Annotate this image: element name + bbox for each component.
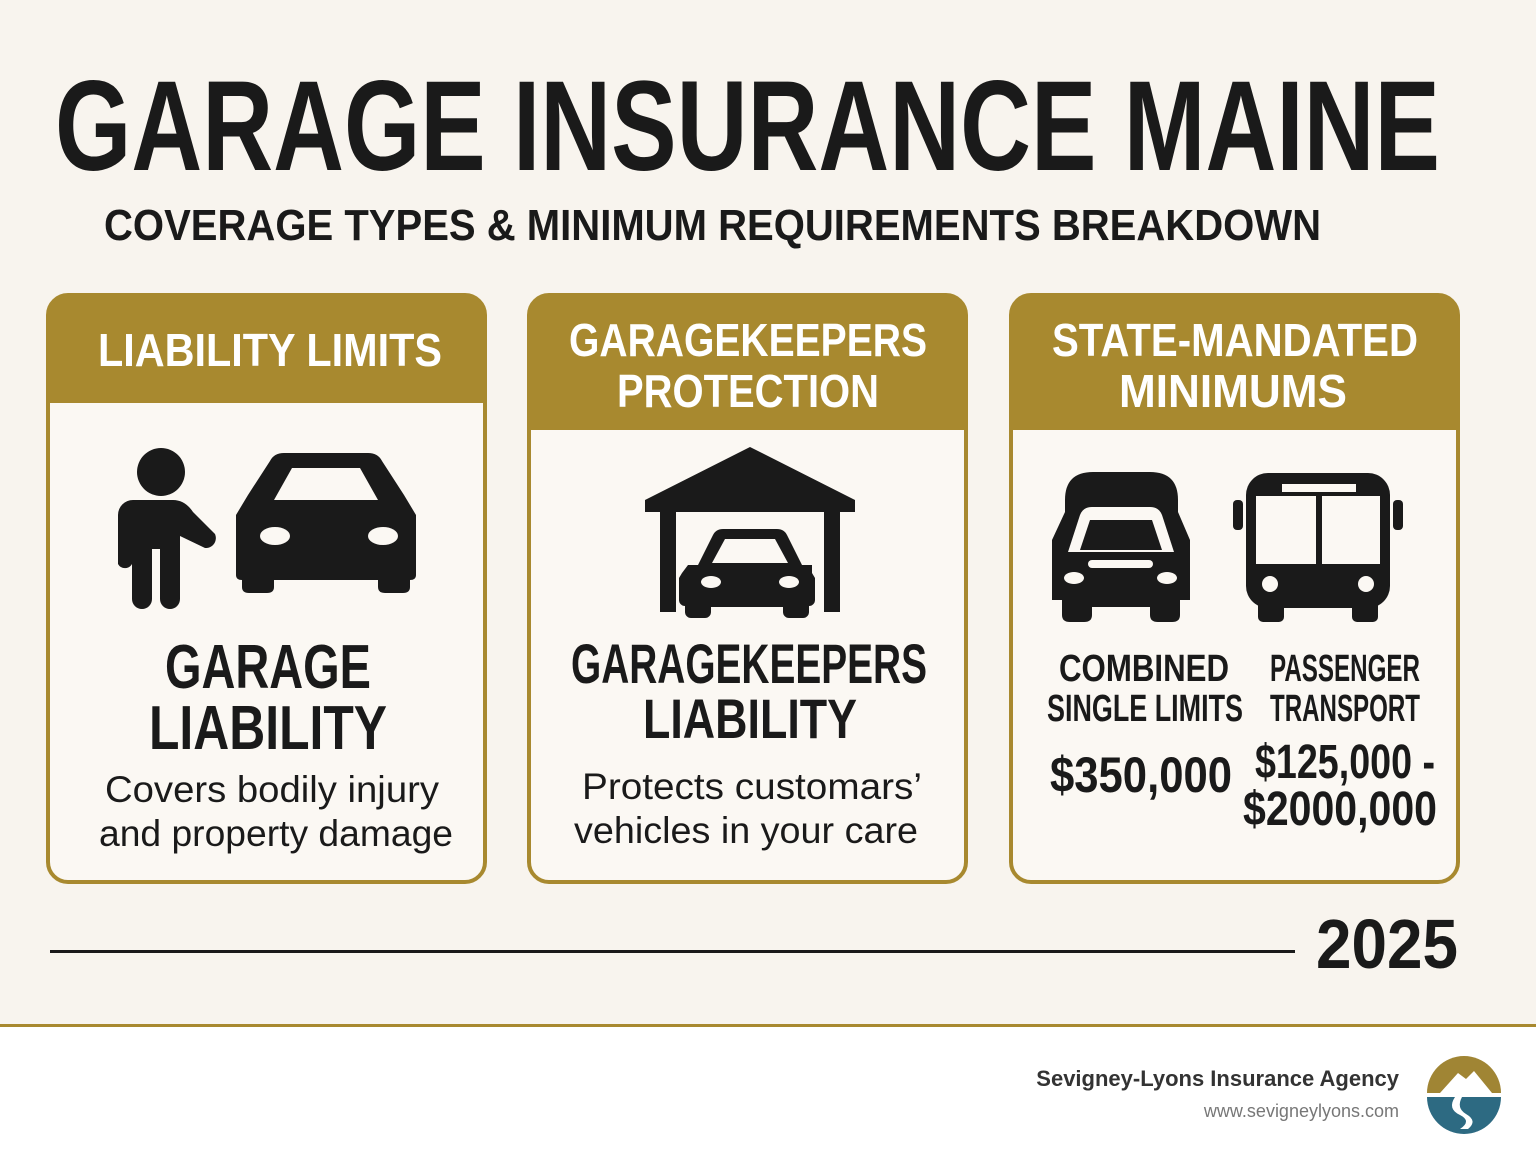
description: Covers bodily injury (105, 769, 440, 810)
description (574, 766, 922, 851)
icon: garage with car (645, 447, 855, 618)
label: combined single limits (1047, 648, 1243, 803)
label: combined single limits: SINGLE LIMITS (1047, 688, 1243, 730)
footer: Sevigney-Lyons Insurance Agency (1036, 1066, 1400, 1091)
label: passenger transport (1243, 648, 1437, 836)
logo (1427, 1056, 1501, 1134)
icon: person and car (118, 448, 416, 609)
heading: garage liability (149, 633, 387, 763)
timeline line with year: 2025 (1316, 905, 1458, 983)
panel header: STATE-MANDATED (1052, 314, 1418, 366)
label: combined single limits: COMBINED (1059, 648, 1229, 690)
label: passenger transport: PASSENGER (1270, 648, 1420, 690)
subtitle: COVERAGE TYPES & MINIMUM REQUIREMENTS BREAKDOWN (104, 201, 1321, 250)
timeline line with year (50, 905, 1458, 983)
panel: garagekeepers (529, 295, 966, 882)
heading: garage liability: GARAGE (165, 633, 371, 702)
panel: liability limits (48, 295, 485, 882)
description: vehicles in your care (574, 810, 918, 851)
panel header: PROTECTION (617, 365, 879, 417)
panel: state-mandated minimums (1011, 295, 1458, 882)
heading: garagekeepers liability: GARAGEKEEPERS (571, 632, 927, 695)
label: passenger transport: $2000,000 (1243, 783, 1437, 836)
heading: garage liability: LIABILITY (149, 694, 387, 763)
label: passenger transport: TRANSPORT (1270, 688, 1420, 730)
icon: truck (1052, 472, 1190, 622)
panel header (529, 295, 966, 430)
heading: garagekeepers liability: LIABILITY (643, 687, 857, 750)
footer (0, 1024, 1536, 1154)
panel header (48, 295, 485, 403)
heading: garagekeepers liability (571, 632, 927, 750)
panel header (1011, 295, 1458, 430)
description: Protects customars’ (582, 766, 922, 807)
description: and property damage (99, 813, 453, 854)
label: combined single limits: $350,000 (1050, 747, 1232, 803)
panel header: GARAGEKEEPERS (569, 314, 927, 366)
description (99, 769, 453, 854)
footer: www.sevigneylyons.com (1203, 1101, 1399, 1121)
icon: bus (1233, 473, 1403, 622)
label: passenger transport: $125,000 - (1255, 736, 1435, 789)
panel header: MINIMUMS (1119, 365, 1347, 417)
panel header: LIABILITY LIMITS (98, 324, 442, 376)
